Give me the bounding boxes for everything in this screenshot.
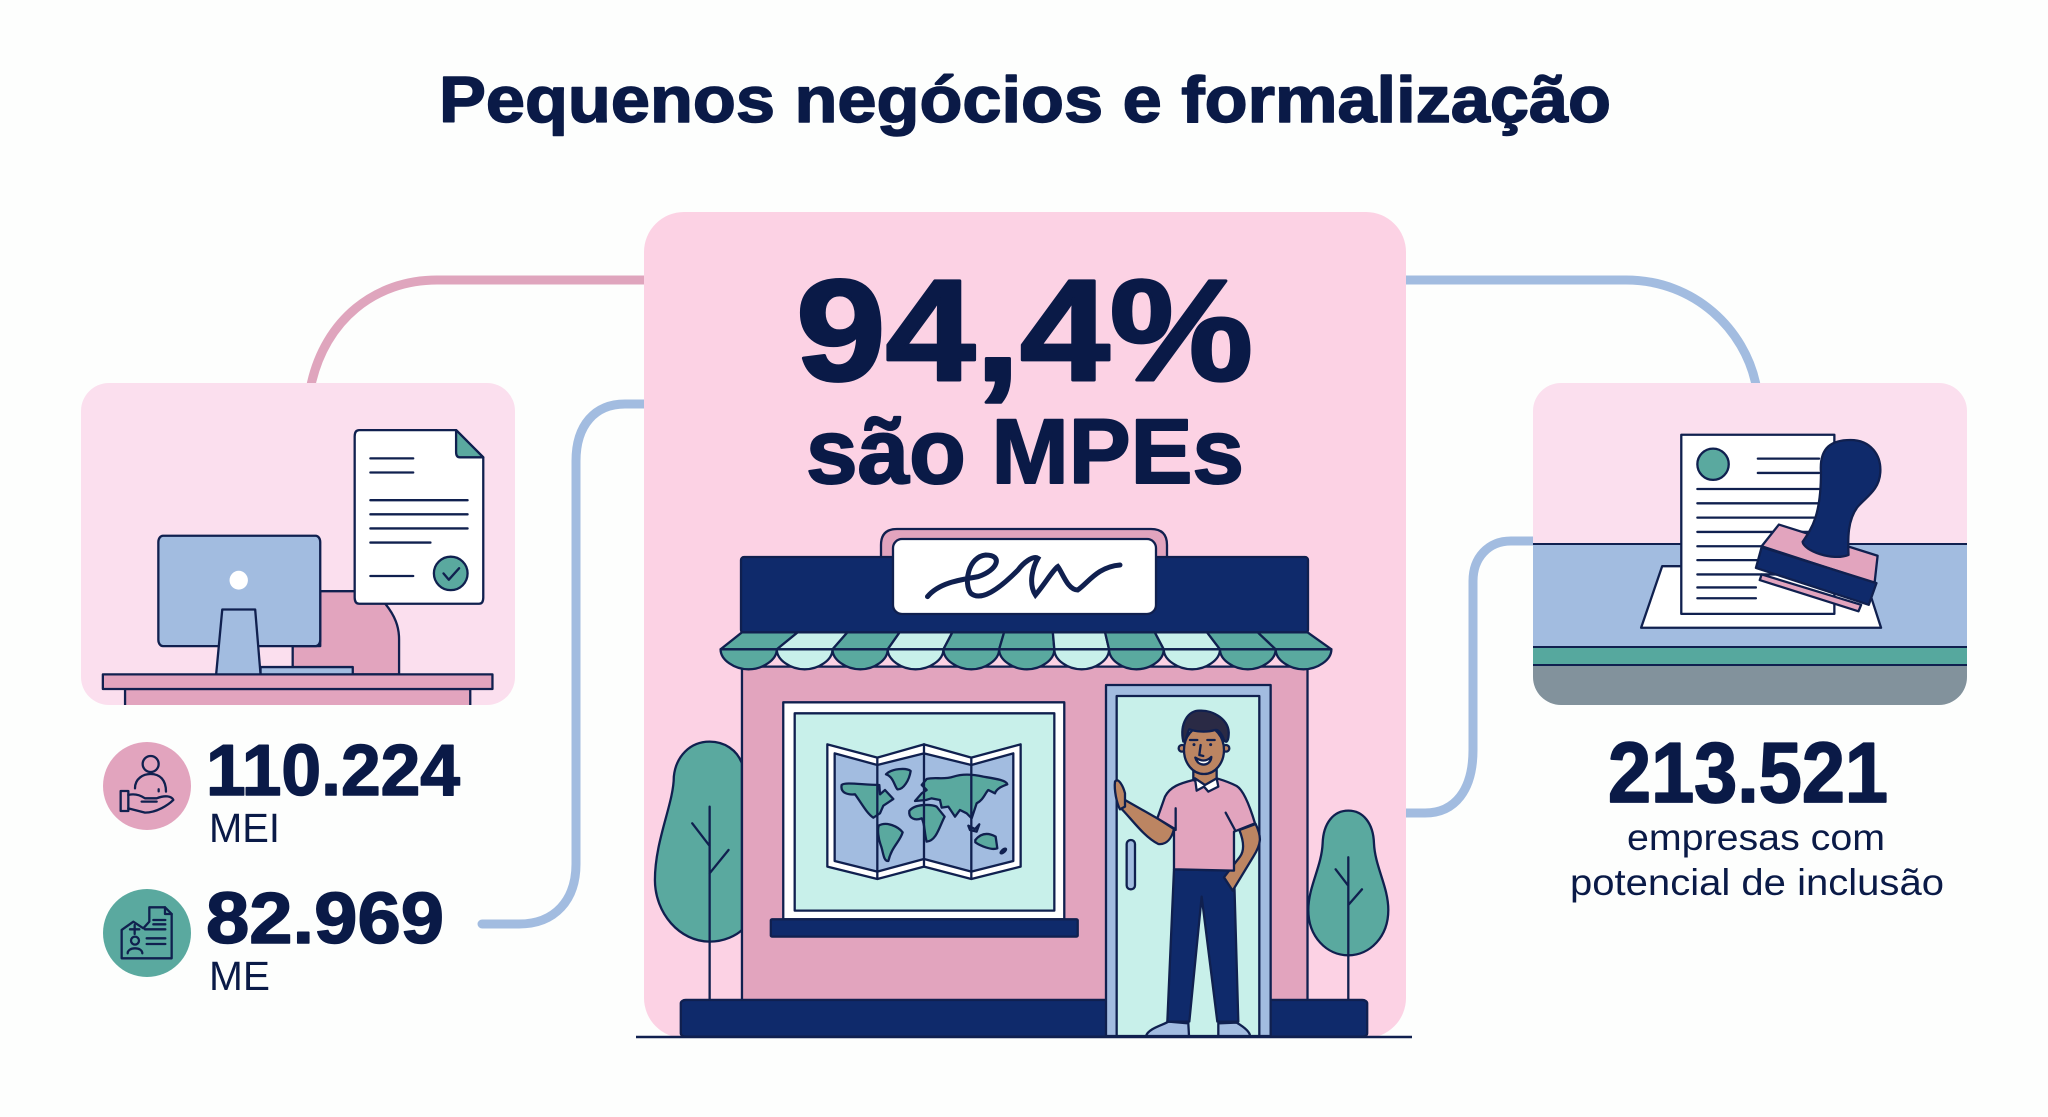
shirt: [1157, 778, 1255, 871]
headline: são MPEs: são MPEs: [806, 401, 1244, 503]
stamp: [1756, 440, 1880, 611]
computer monitor: [158, 536, 320, 674]
icon: company registration document, teal circle: [103, 889, 191, 977]
shop base: [681, 1000, 1367, 1037]
stat: 110.224 MEI: MEI: [209, 805, 280, 851]
document: [1681, 435, 1834, 614]
world map: [827, 744, 1021, 879]
connector: blue, central panel to top of right panel: [1400, 280, 1756, 385]
stat: 110.224 MEI: [206, 731, 460, 851]
ground line: [636, 1036, 1412, 1038]
head: [1179, 711, 1229, 774]
shop sign with signature: [893, 539, 1156, 614]
trousers: [1167, 869, 1238, 1022]
connector: blue, ME figure to central panel: [482, 404, 650, 924]
tree right: [1308, 811, 1388, 1001]
panel: left illustration, computer and document: [81, 383, 515, 720]
title: Pequenos negócios e formalização: [439, 63, 1611, 136]
collar: [1195, 778, 1218, 792]
icon: hand holding person, pink circle: [103, 742, 191, 830]
chair behind the desk: [293, 591, 399, 674]
panel: central highlight: [644, 212, 1406, 1038]
stat: 213.521: 213.521: [1608, 726, 1888, 821]
stat: 82.969 ME: ME: [209, 953, 270, 999]
hand: [1115, 780, 1125, 809]
shop wall: [742, 667, 1308, 1002]
stat: 82.969 ME: 82.969: [206, 879, 444, 959]
tree left: [655, 742, 742, 1000]
window: [771, 702, 1078, 937]
keyboard: [261, 667, 353, 674]
desk: [102, 673, 494, 705]
illustration: storefront with owner: [636, 529, 1412, 1037]
left arm: [1119, 800, 1174, 844]
base sheet: [1641, 566, 1881, 628]
caption: empresas com potencial de inclusão: potencial de inclusão: [1570, 862, 1944, 903]
caption: empresas com potencial de inclusão: empresas com: [1627, 817, 1885, 858]
connector: blue, central panel to side of right panel: [1400, 541, 1536, 813]
headline: 94,4%: 94,4%: [796, 250, 1253, 411]
neck: [1193, 767, 1217, 786]
right arm: [1224, 824, 1260, 891]
door with shop owner: [1106, 685, 1271, 1036]
caption: empresas com potencial de inclusão: [1570, 817, 1944, 903]
document with approval check: [355, 430, 483, 604]
awning: [721, 632, 1331, 669]
sign mount: [881, 529, 1167, 560]
panel: right illustration, stamp and document: [1533, 383, 1967, 705]
connector: pink, MEI panel to central panel: [311, 280, 650, 385]
stat: 82.969 ME: [206, 879, 444, 999]
fascia: [741, 557, 1308, 633]
stat: 110.224 MEI: 110.224: [206, 731, 460, 811]
shoes: [1146, 1022, 1250, 1036]
